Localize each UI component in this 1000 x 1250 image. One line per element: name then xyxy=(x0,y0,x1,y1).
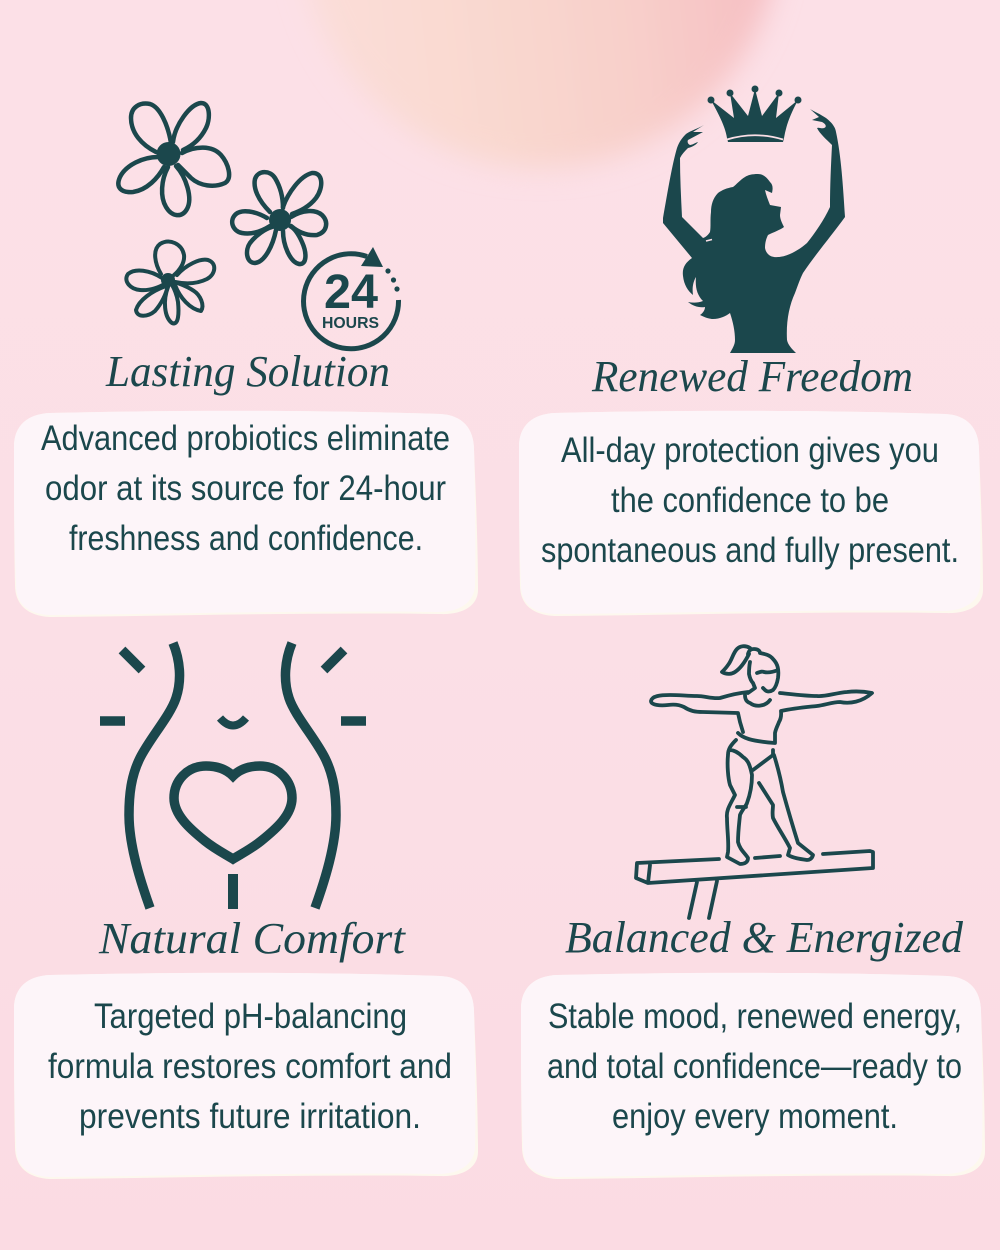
icon: woman silhouette with crown xyxy=(663,86,845,353)
icon: gymnast on balance beam xyxy=(636,646,873,918)
panel: renewed freedom: the confidence to be xyxy=(611,481,889,520)
centre line xyxy=(228,874,238,909)
icon: 24 hours clock: HOURS xyxy=(322,315,379,332)
icon: body with heart xyxy=(100,643,366,909)
panel: natural comfort: formula restores comfort and xyxy=(48,1047,452,1086)
panel: natural comfort xyxy=(14,973,478,1179)
panel: renewed freedom xyxy=(519,411,983,616)
panel: lasting solution: freshness and confidence. xyxy=(69,519,423,558)
panel: balanced and energized xyxy=(521,973,985,1179)
icon: small flower xyxy=(126,242,214,323)
heart xyxy=(174,766,292,859)
gymnast xyxy=(651,646,872,864)
panel: natural comfort: prevents future irritation. xyxy=(79,1097,421,1136)
icon: middle flower xyxy=(232,172,326,264)
balance beam xyxy=(636,851,873,918)
panel: lasting solution: Advanced probiotics eliminate xyxy=(41,419,450,458)
heading: Renewed Freedom: Renewed Freedom xyxy=(591,352,913,401)
radiating dashes xyxy=(100,650,366,721)
icon: 24 hours clock: 24 xyxy=(324,266,378,319)
panel: lasting solution: odor at its source for 24-hour xyxy=(45,469,446,508)
navel xyxy=(220,718,246,726)
heading: Balanced &amp; Energized: Balanced & Energized xyxy=(565,913,964,962)
panel: lasting solution xyxy=(14,411,478,617)
body outline xyxy=(129,643,336,908)
icon: 24 hours clock xyxy=(304,247,400,349)
heading: Lasting Solution: Lasting Solution xyxy=(105,347,390,396)
heading: Natural Comfort: Natural Comfort xyxy=(98,914,407,963)
icon: large flower xyxy=(118,103,229,215)
icon: flowers with 24 hours badge xyxy=(118,103,400,349)
icon: woman silhouette xyxy=(663,109,845,353)
panel: renewed freedom: All-day protection gives you xyxy=(561,431,939,470)
panel: natural comfort: Targeted pH-balancing xyxy=(94,997,407,1036)
panel: balanced and energized: enjoy every moment. xyxy=(612,1097,898,1136)
icon: crown xyxy=(708,86,802,142)
